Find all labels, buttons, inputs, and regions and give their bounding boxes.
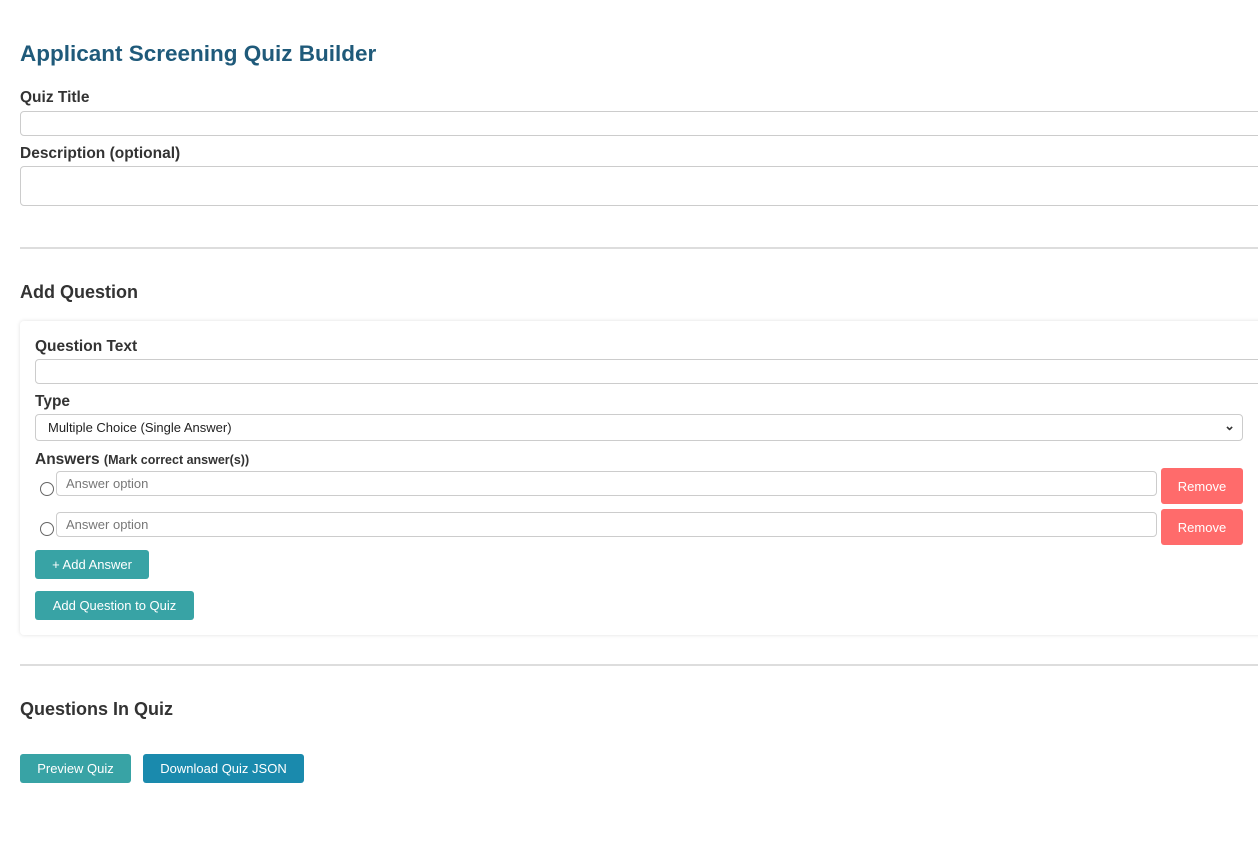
label: quiz title: Quiz Title xyxy=(20,89,89,106)
label: answers: Answers (Mark correct answer(s)) xyxy=(35,451,249,468)
answer row 1: Answer option xyxy=(66,476,148,491)
button: add question xyxy=(35,591,194,620)
label: question text: Question Text xyxy=(35,338,137,355)
button: remove: Remove xyxy=(1178,478,1226,494)
answer row 2 xyxy=(40,509,1243,545)
button: remove xyxy=(1161,509,1243,545)
select: type xyxy=(35,414,1243,441)
select: type: Multiple Choice (Single Answer) xyxy=(48,420,232,435)
label: type: Type xyxy=(35,393,70,410)
answer row 1 xyxy=(40,468,1243,504)
input: description xyxy=(20,166,1258,206)
button: add question: Add Question to Quiz xyxy=(53,598,176,613)
button: remove: Remove xyxy=(1178,520,1226,534)
button: preview quiz xyxy=(20,754,131,783)
title: Applicant Screening Quiz Builder xyxy=(20,41,376,66)
answer row 2: Answer option xyxy=(66,517,148,532)
button: preview quiz: Preview Quiz xyxy=(37,761,114,776)
button: download json xyxy=(143,754,304,783)
button: download json: Download Quiz JSON xyxy=(160,761,287,776)
button: add answer xyxy=(35,550,149,579)
label: description: Description (optional) xyxy=(20,145,180,162)
panel: question form xyxy=(20,321,1258,635)
button: remove xyxy=(1161,468,1243,504)
heading: add question: Add Question xyxy=(20,282,138,302)
button: add answer: + Add Answer xyxy=(52,557,132,572)
heading: questions in quiz: Questions In Quiz xyxy=(20,699,173,719)
input: quiz title xyxy=(20,111,1258,136)
select: type: ⌄ xyxy=(1224,418,1235,433)
input: question text xyxy=(35,359,1258,384)
